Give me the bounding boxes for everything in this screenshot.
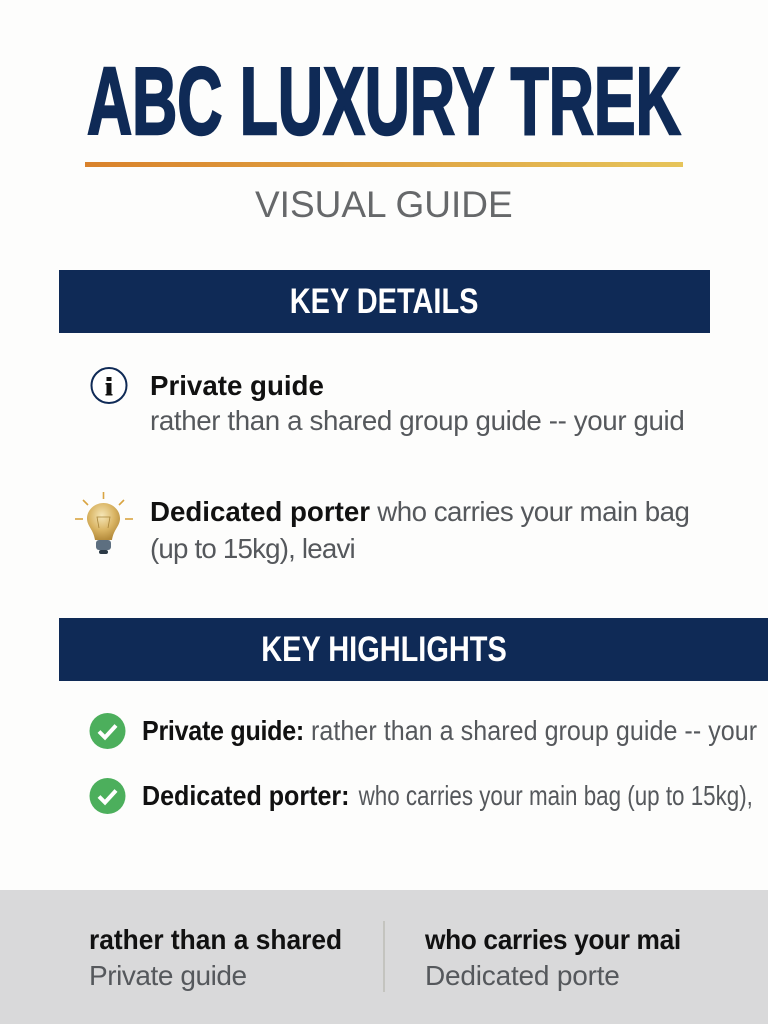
section header: key details: [59, 270, 710, 333]
detail text: [150, 496, 689, 564]
section header: key highlights: KEY HIGHLIGHTS: [261, 630, 507, 669]
detail row: private guide: [90, 367, 684, 436]
icon: check: [90, 713, 126, 749]
section header: key highlights: [59, 618, 768, 681]
icon: check: [90, 778, 126, 814]
highlight row: private guide: [90, 713, 757, 749]
footer stat: private guide: Private guide: [89, 960, 247, 991]
detail text: Private guide: [150, 370, 324, 400]
detail row: dedicated porter: [75, 492, 689, 564]
footer stat: dedicated porter: Dedicated porte: [425, 960, 620, 991]
detail text: (up to 15kg), leavi: [150, 533, 355, 564]
icon: info: [90, 367, 128, 404]
highlight text: Private guide: rather than a shared group guide -- your: [142, 715, 757, 746]
footer stat: dedicated porter: who carries your mai: [425, 924, 681, 955]
subtitle: VISUAL GUIDE: [255, 184, 513, 225]
title: ABC LUXURY TREK: [87, 48, 681, 155]
detail text: rather than a shared group guide -- your guid: [150, 404, 684, 436]
title underline: [85, 162, 683, 167]
highlight text: [142, 780, 753, 811]
detail text: [150, 370, 684, 436]
highlight row: dedicated porter: [90, 778, 753, 814]
section header: key details: KEY DETAILS: [290, 282, 479, 321]
footer stat: dedicated porter: [424, 924, 681, 991]
footer divider: [383, 921, 385, 992]
footer stat: private guide: rather than a shared: [89, 924, 342, 955]
footer stat: private guide: [89, 924, 342, 991]
detail text: Dedicated porter who carries your main bag: [150, 496, 689, 527]
icon: light bulb: [75, 492, 133, 554]
footer panel: [0, 890, 768, 1024]
highlight text: Dedicated porter:: [142, 780, 349, 811]
highlight text: who carries your main bag (up to 15kg),: [358, 780, 753, 811]
